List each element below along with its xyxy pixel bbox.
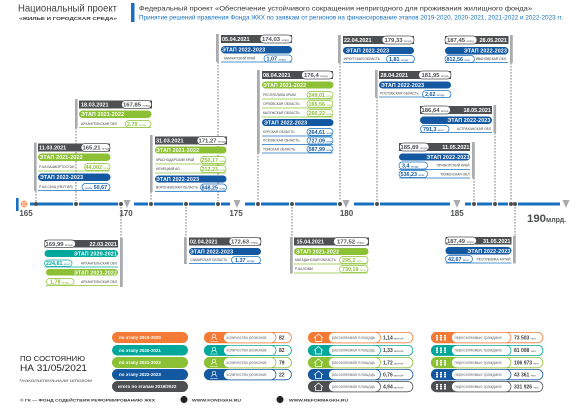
card: 08.04.2021 xyxy=(257,70,334,153)
card: 11.03.2021: Р-КА БАШКОРТОСТАН xyxy=(39,165,75,169)
card: 28.05.2021: 812,56 млн xyxy=(446,57,470,63)
card: 11.05.2021: ТЮМЕНСКАЯ ОБЛ xyxy=(440,172,470,176)
stat column: resettled area: 4,94 млн м² xyxy=(383,384,404,390)
card: 05.04.2021: 1,07 млрд. xyxy=(266,56,287,62)
card: 08.04.2021: ЭТАП 2022-2023 xyxy=(264,121,307,127)
legend: stages: по этапу 2019-2020 xyxy=(119,335,161,340)
card: 02.04.2021: 1,37 млрд. xyxy=(235,258,255,264)
card: 31.05.2021: 187,49 млрд. xyxy=(447,239,475,245)
legend: stages: по этапу 2020-2021 xyxy=(119,348,161,353)
card: 22.03.2021 xyxy=(44,238,123,287)
card: 05.04.2021: 05.04.2021 xyxy=(222,37,250,43)
card: 18.05.2021: 186,64 млрд. xyxy=(422,108,449,114)
stat column: regions: количество регионов xyxy=(226,348,266,352)
stat column: resettled area: 1,14 млн м² xyxy=(383,335,404,341)
card: 31.05.2021: ЭТАП 2022-2023 xyxy=(467,249,510,255)
card: 11.05.2021: ЭТАП 2022-2023 xyxy=(426,155,470,161)
card: 22.04.2021 xyxy=(338,35,414,63)
stat column: resettled citizens: переселяемые граждане xyxy=(454,384,502,389)
status note: ПО СОСТОЯНИЮ xyxy=(20,356,85,363)
card: 11.03.2021: Р-КА САХА (ЯКУТИЯ) xyxy=(39,185,73,189)
stat column: resettled area: расселяемая площадь xyxy=(332,384,375,389)
card: 22.03.2021: АРХАНГЕЛЬСКАЯ ОБЛ xyxy=(81,262,117,266)
scale labels: 170 xyxy=(119,209,133,218)
card: 22.03.2021: 224,61 млн xyxy=(46,261,70,267)
card: 31.05.2021: 42,67 млн xyxy=(448,257,469,263)
card: 18.03.2021: 18.03.2021 xyxy=(81,102,109,108)
card: 22.04.2021: 1,81 млрд. xyxy=(389,57,409,63)
stat column: regions: 82 xyxy=(279,336,285,342)
card: 02.04.2021: 172,63 млрд. xyxy=(231,240,259,246)
scale markers xyxy=(124,200,570,208)
card: 28.04.2021: 181,95 млрд. xyxy=(422,73,449,79)
card: 22.03.2021: 1,78 млрд. xyxy=(50,280,70,286)
card: 31.05.2021: 31.05.2021 xyxy=(483,239,510,245)
heading: federal project xyxy=(139,4,563,22)
card: 08.04.2021: ОРЛОВСКАЯ ОБЛАСТЬ xyxy=(263,102,300,106)
card: 11.03.2021: 11.03.2021 xyxy=(39,146,66,152)
stat column: resettled citizens: переселяемые граждане xyxy=(454,335,502,340)
card: 31.03.2021 xyxy=(150,135,227,192)
card: 08.04.2021: ПСКОВСКАЯ ОБЛАСТЬ xyxy=(263,138,300,142)
scale labels: 175 xyxy=(229,209,243,218)
dotted connectors xyxy=(36,62,515,238)
card: 22.04.2021: ИРКУТСКАЯ ОБЛАСТЬ xyxy=(344,57,380,61)
status note: НА 31/05/2021 xyxy=(20,363,87,373)
heading: federal project: Федеральный проект «Обеспечение устойчивого сокращения непригодного для проживания жилищного фонда» xyxy=(139,4,532,12)
footer: WWW.REFORMAGKH.RU xyxy=(289,398,348,402)
title: national project: Национальный проект xyxy=(18,4,117,14)
card: 05.04.2021: 174,03 млрд. xyxy=(262,37,290,43)
stat column: regions: количество регионов xyxy=(226,372,266,377)
legend: stages xyxy=(112,332,188,392)
card: 28.05.2021: ЭТАП 2022-2023 xyxy=(464,49,507,55)
card: 31.03.2021: НЕНЕЦКИЙ АО xyxy=(156,167,180,171)
stat column: resettled area: расселяемая площадь xyxy=(332,360,375,365)
card: 08.04.2021: ЭТАП 2021-2022 xyxy=(263,83,306,89)
card: 22.04.2021: 179,33 млрд. xyxy=(384,38,412,44)
card: 28.05.2021: 28.05.2021 xyxy=(479,38,507,44)
stat column: resettled area: 0,76 млн м² xyxy=(383,372,404,378)
card: 11.05.2021 xyxy=(399,142,475,178)
card: 18.05.2021: ЭТАП 2022-2023 xyxy=(447,118,490,124)
footer: WWW.FONDGKH.RU xyxy=(192,398,241,402)
card: 28.04.2021: 2,62 млрд. xyxy=(425,92,445,98)
heading: federal project: Принятие решений правления Фонда ЖКХ по заявкам от регионов на финансирование этапов 2019-2020, 2020-2021, 2021-2022 и 2022-2023 гг. xyxy=(139,14,563,22)
card: 08.04.2021: РЕСПУБЛИКА КРЫМ xyxy=(263,93,296,97)
stat column: resettled area: расселяемая площадь xyxy=(332,335,375,340)
stat column: resettled citizens: переселяемые граждане xyxy=(454,360,502,365)
card: 08.04.2021: 587,99 млн xyxy=(308,147,332,153)
legend: stages: по этапу 2022-2023 xyxy=(119,372,161,377)
card: 11.05.2021: 185,89 млрд. xyxy=(400,145,428,151)
legend: stages: итого по этапам 2019/2022 xyxy=(118,384,177,389)
card: 31.03.2021: КРАСНОДАРСКИЙ КРАЙ xyxy=(156,158,195,162)
card: 31.03.2021: ЭТАП 2021-2022 xyxy=(156,148,199,154)
stat column: regions: 82 xyxy=(279,348,285,354)
stat column: resettled citizens: 331 926 чел. xyxy=(514,384,539,390)
card: 28.05.2021 xyxy=(445,35,513,63)
stat column: resettled area xyxy=(308,332,413,392)
card: 15.04.2021: МАГАДАНСКАЯ ОБЛАСТЬ xyxy=(295,258,336,262)
card: 11.03.2021: ЭТАП 2022-2023 xyxy=(40,175,83,181)
stat column: resettled citizens: 106 973 чел. xyxy=(514,360,539,366)
card: 05.04.2021: КАМЧАТСКИЙ КРАЙ xyxy=(224,56,256,60)
card: 28.05.2021: 187,45 млрд. xyxy=(447,38,475,44)
card: 18.03.2021: 167,85 млрд. xyxy=(123,102,151,108)
card: 15.04.2021: 295,2 млн xyxy=(342,258,363,264)
timeline dots xyxy=(34,202,517,206)
card: 22.04.2021: ЭТАП 2022-2023 xyxy=(346,49,389,55)
card: 11.03.2021: 165,21 млрд. xyxy=(82,146,110,152)
stat column: resettled citizens: 43 361 чел. xyxy=(514,372,537,378)
card: 11.05.2021: 3,4 млрд. xyxy=(402,163,419,169)
scale labels: 190млрд. xyxy=(527,213,566,225)
card: 31.03.2021: 848,25 млн xyxy=(202,185,225,191)
card: 11.03.2021: 44,002 млн xyxy=(86,165,109,171)
card: 22.03.2021: АРХАНГЕЛЬСКАЯ ОБЛ xyxy=(81,280,117,284)
card: 18.03.2021: 2,79 млрд. xyxy=(127,122,147,128)
footer xyxy=(20,396,348,403)
stat column: resettled area: расселяемая площадь xyxy=(332,348,375,352)
card: 08.04.2021: 264,61 млн xyxy=(308,130,332,136)
card: 08.04.2021: 08.04.2021 xyxy=(263,73,291,79)
card: 28.04.2021: ЭТАП 2022-2023 xyxy=(381,83,424,89)
card: 08.04.2021: 249,01 млн xyxy=(308,93,332,99)
card: 31.05.2021 xyxy=(446,236,516,264)
stat column: resettled citizens: переселяемые граждане xyxy=(454,348,502,352)
stat column: regions: количество регионов xyxy=(226,335,266,340)
card: 15.04.2021: 15.04.2021 xyxy=(296,240,324,246)
card: 31.03.2021: ЭТАП 2022-2023 xyxy=(156,177,199,183)
scale labels: 165 xyxy=(19,209,33,218)
card: 28.05.2021: ИВАНОВСКАЯ ОБЛ. xyxy=(476,57,507,61)
card: 08.04.2021: ТОМСКАЯ ОБЛАСТЬ xyxy=(263,148,295,152)
title: national project xyxy=(18,4,117,22)
card: 08.04.2021: 176,4 млрд. xyxy=(304,73,329,79)
card: 15.04.2021: 177,52 млрд. xyxy=(337,240,365,246)
footer: © ГК — ФОНД СОДЕЙСТВИЯ РЕФОРМИРОВАНИЮ ЖКХ xyxy=(20,398,155,402)
scale labels: 180 xyxy=(340,209,354,218)
stat column: resettled area: расселяемая площадь xyxy=(332,372,375,377)
card: 15.04.2021: 730,19 млн xyxy=(342,267,366,273)
card: 11.03.2021: ЭТАП 2021-2022 xyxy=(40,155,83,161)
card: 31.03.2021: ВОРОНЕЖСКАЯ ОБЛАСТЬ xyxy=(156,186,198,190)
card: 08.04.2021: КУРСКАЯ ОБЛАСТЬ xyxy=(263,130,294,134)
card: 18.05.2021: 18.05.2021 xyxy=(463,108,491,114)
scale labels xyxy=(19,209,566,225)
legend: stages: по этапу 2021-2022 xyxy=(119,360,161,365)
status note xyxy=(19,356,92,383)
card: 22.03.2021: 169,99 млрд. xyxy=(46,242,73,248)
stat column: regions: количество регионов xyxy=(226,360,266,365)
card: 18.05.2021: АСТРАХАНСКАЯ ОБЛ xyxy=(457,127,491,131)
card: 22.04.2021: 22.04.2021 xyxy=(344,38,372,44)
stat column: regions: 22 xyxy=(279,372,285,378)
stat column: resettled citizens: 81 008 чел. xyxy=(514,348,537,354)
card: 02.04.2021: ЭТАП 2022-2023 xyxy=(190,250,233,256)
card: 31.05.2021: РЕСПУБЛИКА АЛТАЙ xyxy=(477,258,511,262)
card: 05.04.2021: ЭТАП 2022-2023 xyxy=(222,48,265,54)
card: 31.03.2021: 212,23 млн xyxy=(202,167,225,173)
card: 11.03.2021 xyxy=(34,142,110,191)
card: 15.04.2021 xyxy=(290,237,369,274)
card: 22.03.2021: 22.03.2021 xyxy=(89,242,117,248)
card: 31.03.2021: 250,17 млн xyxy=(202,158,225,164)
card: 11.05.2021: 536,23 млн xyxy=(400,172,424,178)
card: 22.03.2021: ЭТАП 2021-2022 xyxy=(74,270,117,276)
stat column: resettled citizens xyxy=(431,332,543,392)
card: 11.05.2021: ПРИМОРСКИЙ КРАЙ xyxy=(437,164,470,168)
card: 18.05.2021: 791,3 млн xyxy=(423,127,444,133)
card: 15.04.2021: Р-КА КОМИ xyxy=(295,267,314,271)
card: 02.04.2021: 02.04.2021 xyxy=(190,240,218,246)
card: 02.04.2021: САМАРСКАЯ ОБЛАСТЬ xyxy=(190,258,227,262)
card: 11.03.2021: дома 50,67 xyxy=(85,185,107,191)
stat column: regions xyxy=(204,332,291,380)
card: 08.04.2021: 727,09 млн xyxy=(308,138,332,144)
card: 18.03.2021: АРХАНГЕЛЬСКАЯ ОБЛ xyxy=(81,122,117,126)
card: 11.05.2021: 11.05.2021 xyxy=(442,145,470,151)
card: 08.04.2021: 266,22 млн xyxy=(308,111,332,117)
timeline axis xyxy=(16,198,573,211)
card: 28.04.2021 xyxy=(375,70,451,98)
card: 15.04.2021: ЭТАП 2021-2022 xyxy=(296,250,339,256)
icon: start ball xyxy=(21,201,27,207)
card: 05.04.2021 xyxy=(216,34,292,62)
stat column: resettled area: 1,72 млн м² xyxy=(383,360,404,366)
stat column: resettled citizens: переселяемые граждане xyxy=(454,372,502,377)
card: 18.03.2021: ЭТАП 2021-2022 xyxy=(81,112,124,118)
accent bar xyxy=(131,3,134,22)
scale labels: 185 xyxy=(450,209,464,218)
stat column: resettled area: 1,33 млн м² xyxy=(383,348,404,354)
stat column: regions: 79 xyxy=(279,360,285,366)
card: 28.04.2021: РОСТОВСКАЯ ОБЛАСТЬ xyxy=(380,92,419,96)
card: 18.03.2021 xyxy=(75,99,152,128)
card: 02.04.2021 xyxy=(184,237,261,264)
card: 31.03.2021: 31.03.2021 xyxy=(156,138,184,144)
card: 28.04.2021: 28.04.2021 xyxy=(380,73,408,79)
card: 18.05.2021 xyxy=(420,105,496,133)
card: 22.03.2021: ЭТАП 2020-2021 xyxy=(74,252,117,258)
card: 31.03.2021: 171,27 млрд. xyxy=(198,138,226,144)
gaps around markers xyxy=(27,201,573,207)
card: 08.04.2021: 165,56 млн xyxy=(308,102,332,108)
stat column: resettled citizens: 73 503 чел. xyxy=(514,335,537,341)
card: 08.04.2021: КАЛУЖСКАЯ ОБЛАСТЬ xyxy=(263,111,300,115)
title: national project: «ЖИЛЬЕ И ГОРОДСКАЯ СРЕДА» xyxy=(19,16,117,22)
status note: *накопительным итогом xyxy=(19,378,92,383)
